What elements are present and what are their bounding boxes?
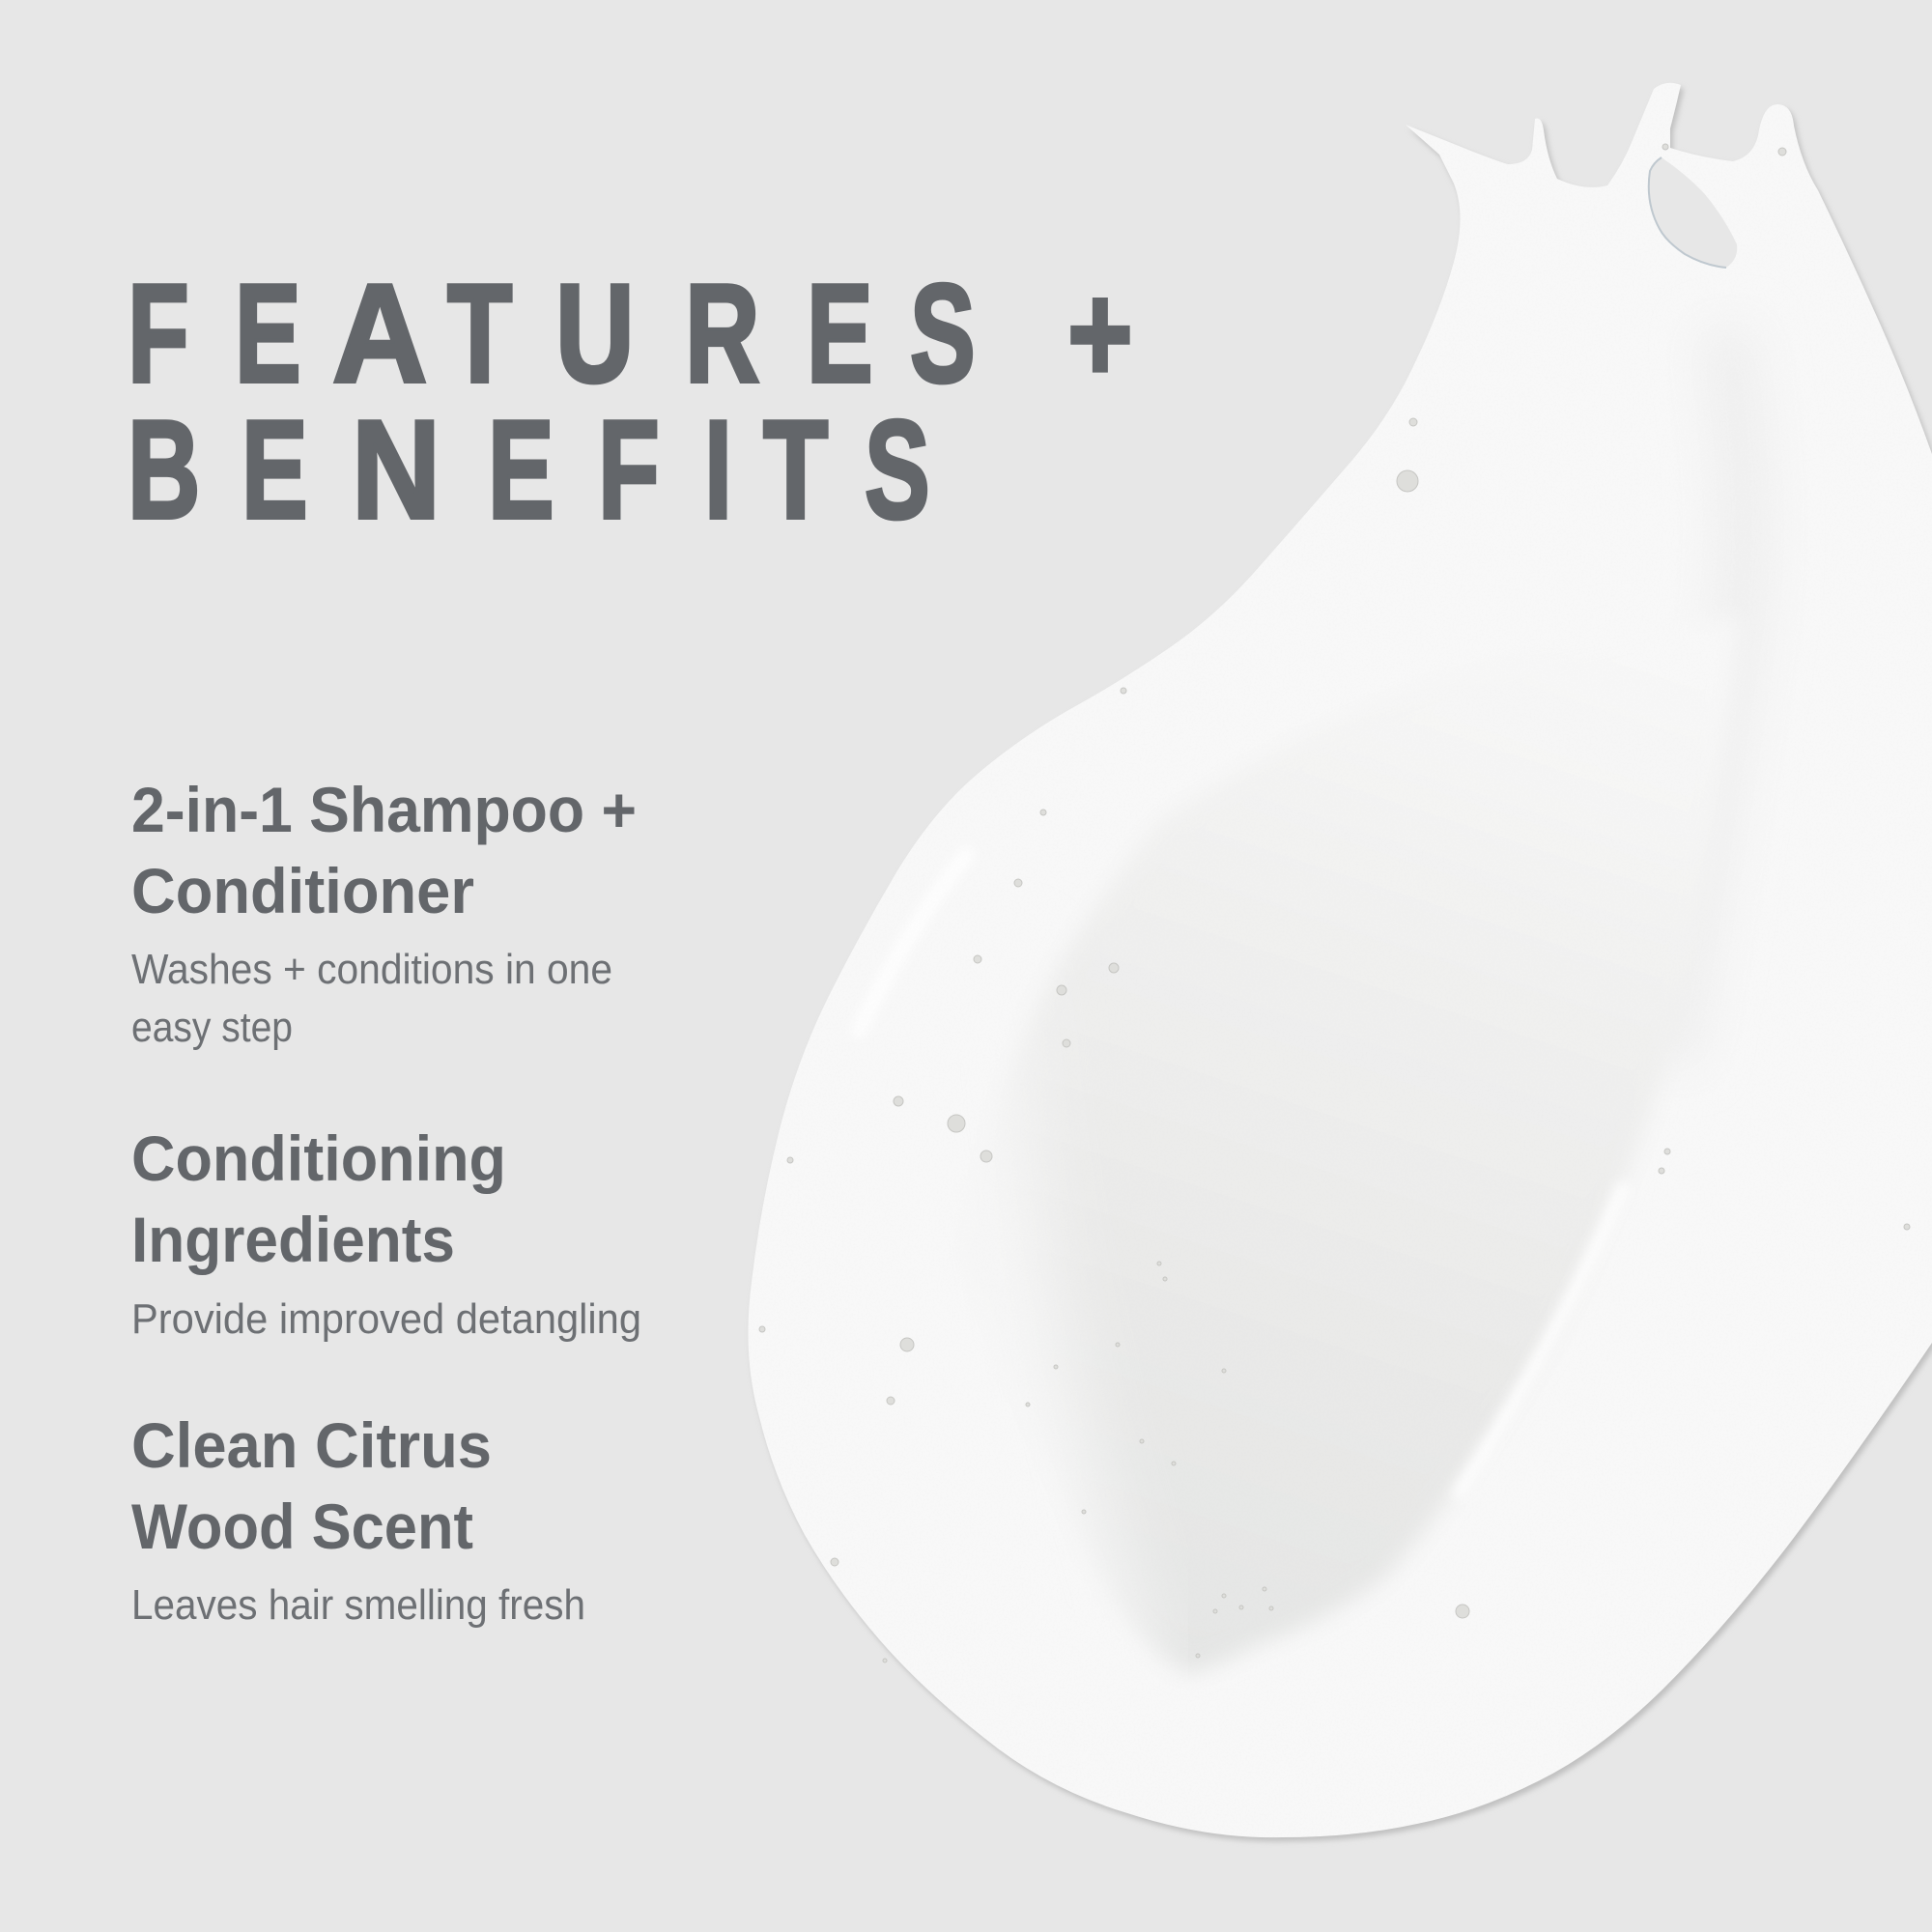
product swatch: white foam smear <box>744 77 1932 1845</box>
title line 1: T <box>447 255 512 412</box>
title line 1: F <box>128 255 189 412</box>
title line 2: I <box>704 391 732 548</box>
title <box>128 254 1133 549</box>
title line 1: R <box>685 256 759 412</box>
feature heading: 2-in-1 Shampoo + <box>131 774 637 845</box>
title line 2: E <box>242 391 308 548</box>
title line 2: S <box>865 391 930 548</box>
feature heading: Conditioning <box>131 1122 506 1194</box>
title line 2: N <box>352 390 440 548</box>
feature description: Washes + conditions in one <box>131 946 612 993</box>
title line 1: A <box>332 255 427 412</box>
feature: 2-in-1 <box>131 774 637 1051</box>
feature heading: Clean Citrus <box>131 1409 492 1481</box>
title line 1: E <box>235 255 301 412</box>
feature description: Provide improved detangling <box>131 1295 641 1343</box>
title line 2: F <box>598 391 660 548</box>
feature description: Leaves hair smelling fresh <box>131 1581 585 1629</box>
title line 2 <box>128 390 930 549</box>
title line 2: E <box>488 391 554 548</box>
title line 1: S <box>910 255 976 412</box>
opening in the foam <box>1649 157 1737 268</box>
feature: scent <box>131 1409 585 1629</box>
title line 1: E <box>807 255 873 412</box>
title line 2: T <box>763 391 828 549</box>
title line 1: + <box>1067 255 1133 412</box>
feature: conditioning ingredients <box>131 1122 641 1343</box>
feature heading line 2: Wood Scent <box>131 1491 473 1562</box>
title line 1 <box>128 254 1133 412</box>
title line 2: B <box>128 391 200 548</box>
opening rim shadow <box>1649 157 1726 268</box>
feature description line 2: easy step <box>131 1004 293 1051</box>
feature heading line 2: Ingredients <box>131 1204 455 1275</box>
feature heading line 2: Conditioner <box>131 855 474 926</box>
title line 1: U <box>555 254 635 412</box>
air bubbles <box>759 144 1910 1662</box>
